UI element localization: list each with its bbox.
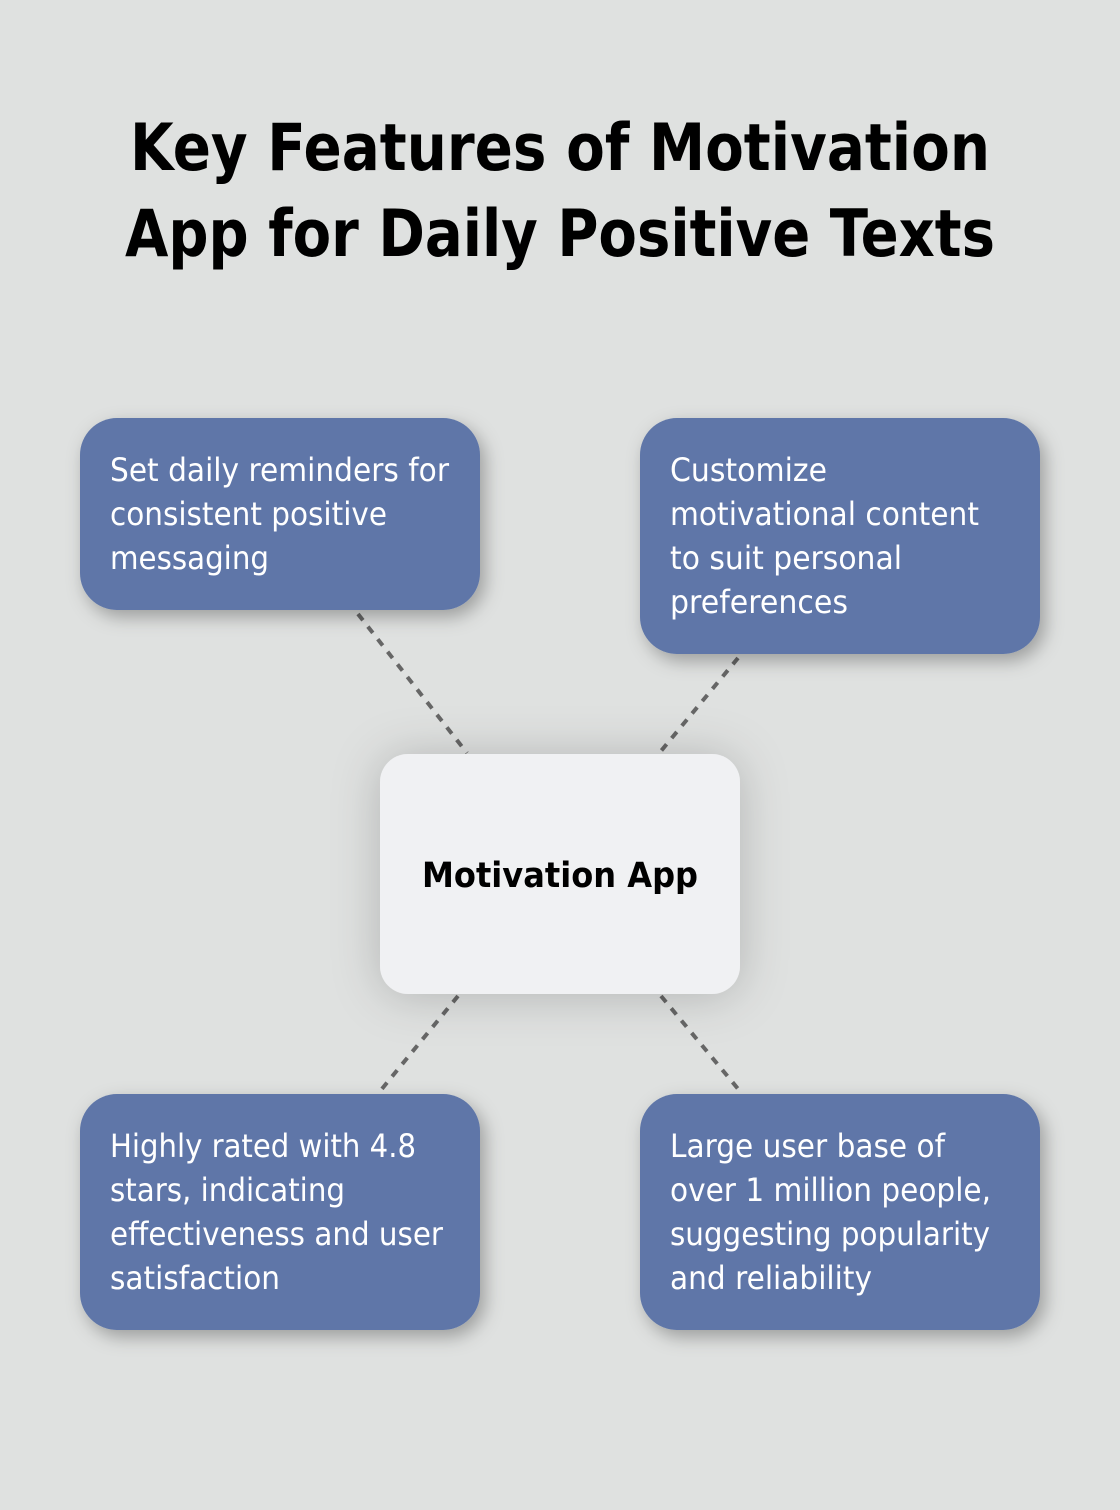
panel: highly rated: effectiveness and user bbox=[110, 1215, 444, 1253]
panel: large user base: Large user base of bbox=[670, 1127, 946, 1165]
connector: bottom left bbox=[381, 996, 458, 1090]
panel: highly rated: satisfaction bbox=[110, 1259, 280, 1297]
panel: large user base: and reliability bbox=[670, 1259, 872, 1297]
panel: highly rated bbox=[80, 1094, 480, 1330]
panel: highly rated: stars, indicating bbox=[110, 1171, 345, 1209]
panel: daily reminders: Set daily reminders for bbox=[110, 451, 450, 489]
title: Key Features of Motivation bbox=[130, 111, 990, 186]
panel: large user base: over 1 million people, bbox=[670, 1171, 991, 1209]
panel: customize content bbox=[640, 418, 1040, 654]
connector: top right bbox=[661, 658, 738, 751]
panel: customize content: Customize bbox=[670, 451, 827, 489]
title: App for Daily Positive Texts bbox=[125, 197, 995, 272]
panel: large user base: suggesting popularity bbox=[670, 1215, 990, 1253]
panel: center Motivation App: Motivation App bbox=[422, 856, 698, 896]
panel: daily reminders: consistent positive bbox=[110, 495, 387, 533]
panel: customize content: to suit personal bbox=[670, 539, 902, 577]
panel: daily reminders bbox=[80, 418, 480, 610]
title bbox=[125, 111, 995, 272]
panel: customize content: preferences bbox=[670, 583, 848, 621]
connector: top left bbox=[358, 614, 467, 753]
panel: highly rated: Highly rated with 4.8 bbox=[110, 1127, 416, 1165]
panel: center Motivation App bbox=[380, 754, 740, 994]
panel: daily reminders: messaging bbox=[110, 539, 269, 577]
panel: customize content: motivational content bbox=[670, 495, 979, 533]
panel: large user base bbox=[640, 1094, 1040, 1330]
connector: bottom right bbox=[661, 996, 739, 1090]
